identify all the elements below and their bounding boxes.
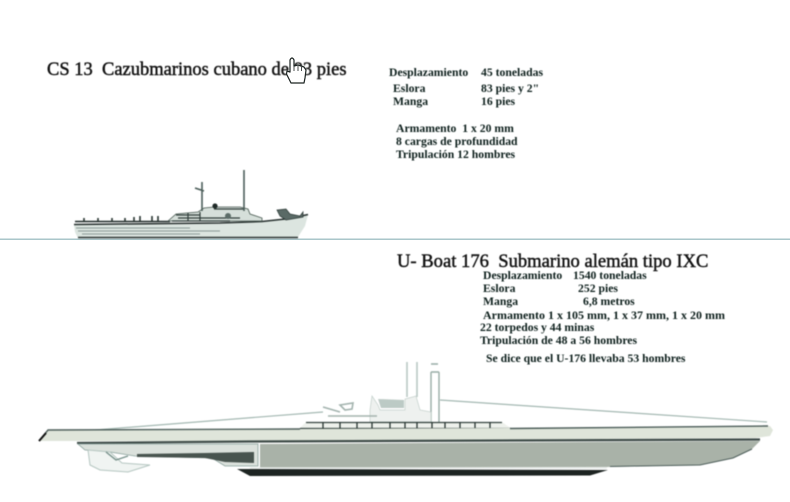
text block: U-Boat 176 specifications: Armamento 1 x 105 mm, 1 x 37 mm, 1 x 20 mm [483,308,725,322]
text block: CS 13 specifications: 83 pies y 2" [481,82,539,95]
text block: CS 13 specifications: 16 pies [481,95,515,108]
text block: CS 13 specifications: Manga [393,95,428,108]
text block: CS 13 specifications: 8 cargas de profundidad [396,135,518,148]
text block: U-Boat 176 specifications: 252 pies [578,282,618,295]
horizon line [0,238,790,240]
boat hull [74,215,308,238]
text block: U-Boat 176 specifications: 1540 toneladas [573,269,647,282]
superstructure deck with rails [299,422,512,429]
text block: CS 13 specifications: Armamento 1 x 20 mm [396,122,514,135]
text block: U-Boat 176 specifications: 6,8 metros [583,295,635,308]
text block: CS 13 specifications: Tripulación 12 hombres [396,148,515,161]
text block: U-Boat 176 specifications: Manga [483,295,518,308]
main deck band [39,426,773,441]
text block: CS 13 specifications: Eslora [393,82,425,95]
text block: CS 13 specifications [388,66,544,162]
boat stern gun [277,209,303,220]
text block: U-Boat 176 specifications: Eslora [483,282,515,295]
periscopes and snorkel mast [407,362,417,397]
hull stern section [78,444,258,466]
text block: U-Boat 176 specifications: Desplazamiento [483,269,562,282]
illustration: U-176 submarine [39,362,773,476]
conning tower [370,396,431,422]
icon: hand cursor [286,58,306,83]
text block: CS 13 specifications: Desplazamiento [389,66,468,79]
text block: U-Boat 176 specifications: Tripulación de 48 a 56 hombres [480,334,637,347]
heading: CS 13: CS 13 Cazubmarinos cubano de 83 pies [47,60,347,80]
keel [237,469,608,476]
main hull [260,441,760,468]
heading: U-Boat 176: U- Boat 176 Submarino alemán tipo IXC [397,251,708,272]
rudder and propeller [88,450,150,472]
deck gun [323,403,377,416]
text block: U-Boat 176 specifications: 22 torpedos y 44 minas [480,321,594,334]
boat superstructure [168,207,262,221]
illustration: CS 13 patrol boat [74,170,308,238]
text block: CS 13 specifications: 45 toneladas [481,66,543,79]
waterline stripe [77,440,760,443]
text block: U-Boat 176 specifications [479,269,726,366]
text block: U-Boat 176 specifications: Se dice que el U-176 llevaba 53 hombres [486,352,685,365]
net cables [95,400,767,430]
boat masts [195,170,244,211]
boat deck details [75,220,170,222]
